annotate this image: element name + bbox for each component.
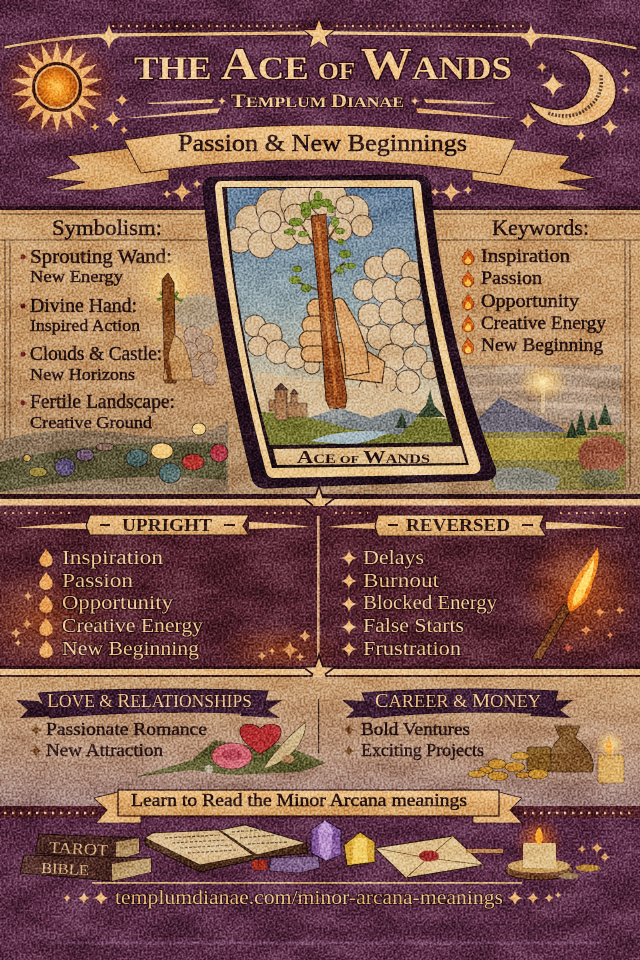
symbolism list: New Energy (30, 267, 124, 286)
strip with dots (0, 806, 640, 818)
panel: love and career (0, 677, 640, 809)
icon: sun (0, 29, 129, 145)
reversed list: Frustration (363, 638, 461, 660)
decorative stars beside card (162, 179, 473, 203)
symbolism list: Inspired Action (30, 316, 141, 335)
thumb and palm (334, 298, 369, 376)
panel: upright and reversed (0, 506, 640, 680)
tarot card (203, 175, 496, 488)
landscape (260, 408, 450, 445)
upright list: New Beginning (62, 638, 199, 660)
branches and leaves (284, 191, 356, 292)
reversed list (340, 547, 497, 660)
clouds (227, 179, 439, 397)
career list: Exciting Projects (361, 740, 484, 760)
icon: crescent moon (518, 49, 632, 142)
love list: New Attraction (46, 740, 163, 760)
love ribbon: LOVE & RELATIONSHIPS (47, 690, 252, 712)
bottom streak (50, 942, 600, 944)
card illustration (227, 188, 453, 445)
title: THE ACE OF WANDS (134, 38, 512, 89)
symbolism list: Creative Ground (30, 413, 153, 432)
keywords list: Opportunity (481, 291, 580, 312)
illustration: landscape (450, 362, 626, 490)
castle (269, 383, 307, 420)
heading: symbolism: Symbolism: (52, 215, 162, 240)
love list: Passionate Romance (46, 719, 207, 739)
divider with star (0, 486, 640, 517)
upright list: Opportunity (62, 592, 173, 614)
footer still life (20, 814, 610, 881)
reversed list: Burnout (363, 570, 440, 592)
keywords list: Passion (481, 268, 543, 289)
love ribbon (16, 689, 282, 718)
reversed list: False Starts (363, 615, 464, 637)
panel: symbolism (0, 206, 640, 495)
keywords list: New Beginning (481, 335, 604, 356)
icon: lit candle (505, 814, 610, 880)
keywords list (462, 246, 606, 356)
keywords list: Inspiration (481, 246, 571, 267)
symbolism list (20, 246, 175, 432)
reversed list: Blocked Energy (363, 592, 497, 614)
hand fingers (299, 299, 385, 383)
upright heading ribbon: UPRIGHT (122, 515, 212, 535)
banner: Passion and New Beginnings (43, 125, 597, 190)
heading: keywords: Keywords: (492, 215, 589, 240)
illustration: flowers (0, 420, 228, 492)
reversed heading ribbon (326, 515, 627, 536)
banner: learn to read: Learn to Read the Minor Arcana meanings (131, 790, 467, 810)
panel: keywords (450, 215, 626, 490)
upright list: Passion (62, 570, 133, 592)
banner: learn to read (94, 790, 522, 823)
career ribbon (342, 689, 573, 718)
icon: open book (145, 825, 308, 872)
card frame (203, 175, 496, 488)
card label strip: A CE OF W ANDS (297, 447, 430, 467)
illustration: torch (532, 547, 625, 660)
illustration: heart, rose and wing (135, 722, 326, 777)
upright heading ribbon (14, 515, 312, 535)
subtitle with flourishes (127, 91, 514, 118)
symbolism list: Clouds & Castle: (30, 343, 162, 365)
divider with star (0, 655, 640, 686)
reversed heading ribbon: REVERSED (406, 515, 510, 535)
upright list (39, 547, 203, 660)
icon: sealed envelope (375, 836, 484, 878)
wand (311, 214, 347, 425)
career ribbon: CAREER & MONEY (375, 690, 541, 712)
footer url: templumdianae.com/minor-arcana-meanings (115, 887, 503, 909)
subtitle with flourishes: TEMPLUM DIANAE (231, 91, 404, 112)
decorative sparkles (10, 591, 312, 662)
love list (30, 719, 207, 760)
upright list: Creative Energy (62, 615, 203, 637)
icon: gems and small book (252, 820, 375, 873)
career list: Bold Ventures (361, 719, 470, 739)
top ornamental rule (4, 18, 637, 51)
reversed list: Delays (363, 547, 424, 569)
icon: tarot and bible books (20, 834, 151, 881)
keywords list: Creative Energy (481, 313, 606, 334)
symbolism list: Sprouting Wand: (30, 246, 172, 268)
symbolism list: Divine Hand: (30, 295, 137, 317)
career list (342, 719, 484, 760)
card label strip (273, 446, 466, 467)
symbolism list: New Horizons (30, 365, 135, 384)
icon: tarot and bible books: BIBLE (41, 861, 89, 879)
symbolism list: Fertile Landscape: (30, 391, 175, 413)
illustration: small wand in hand (132, 253, 222, 385)
upright list: Inspiration (62, 547, 163, 569)
icon: tarot and bible books: TAROT (49, 839, 109, 860)
header section (0, 18, 637, 203)
illustration: coins, pouch and candle (468, 726, 626, 783)
banner: Passion and New Beginnings: Passion & New Beginnings (178, 131, 467, 157)
